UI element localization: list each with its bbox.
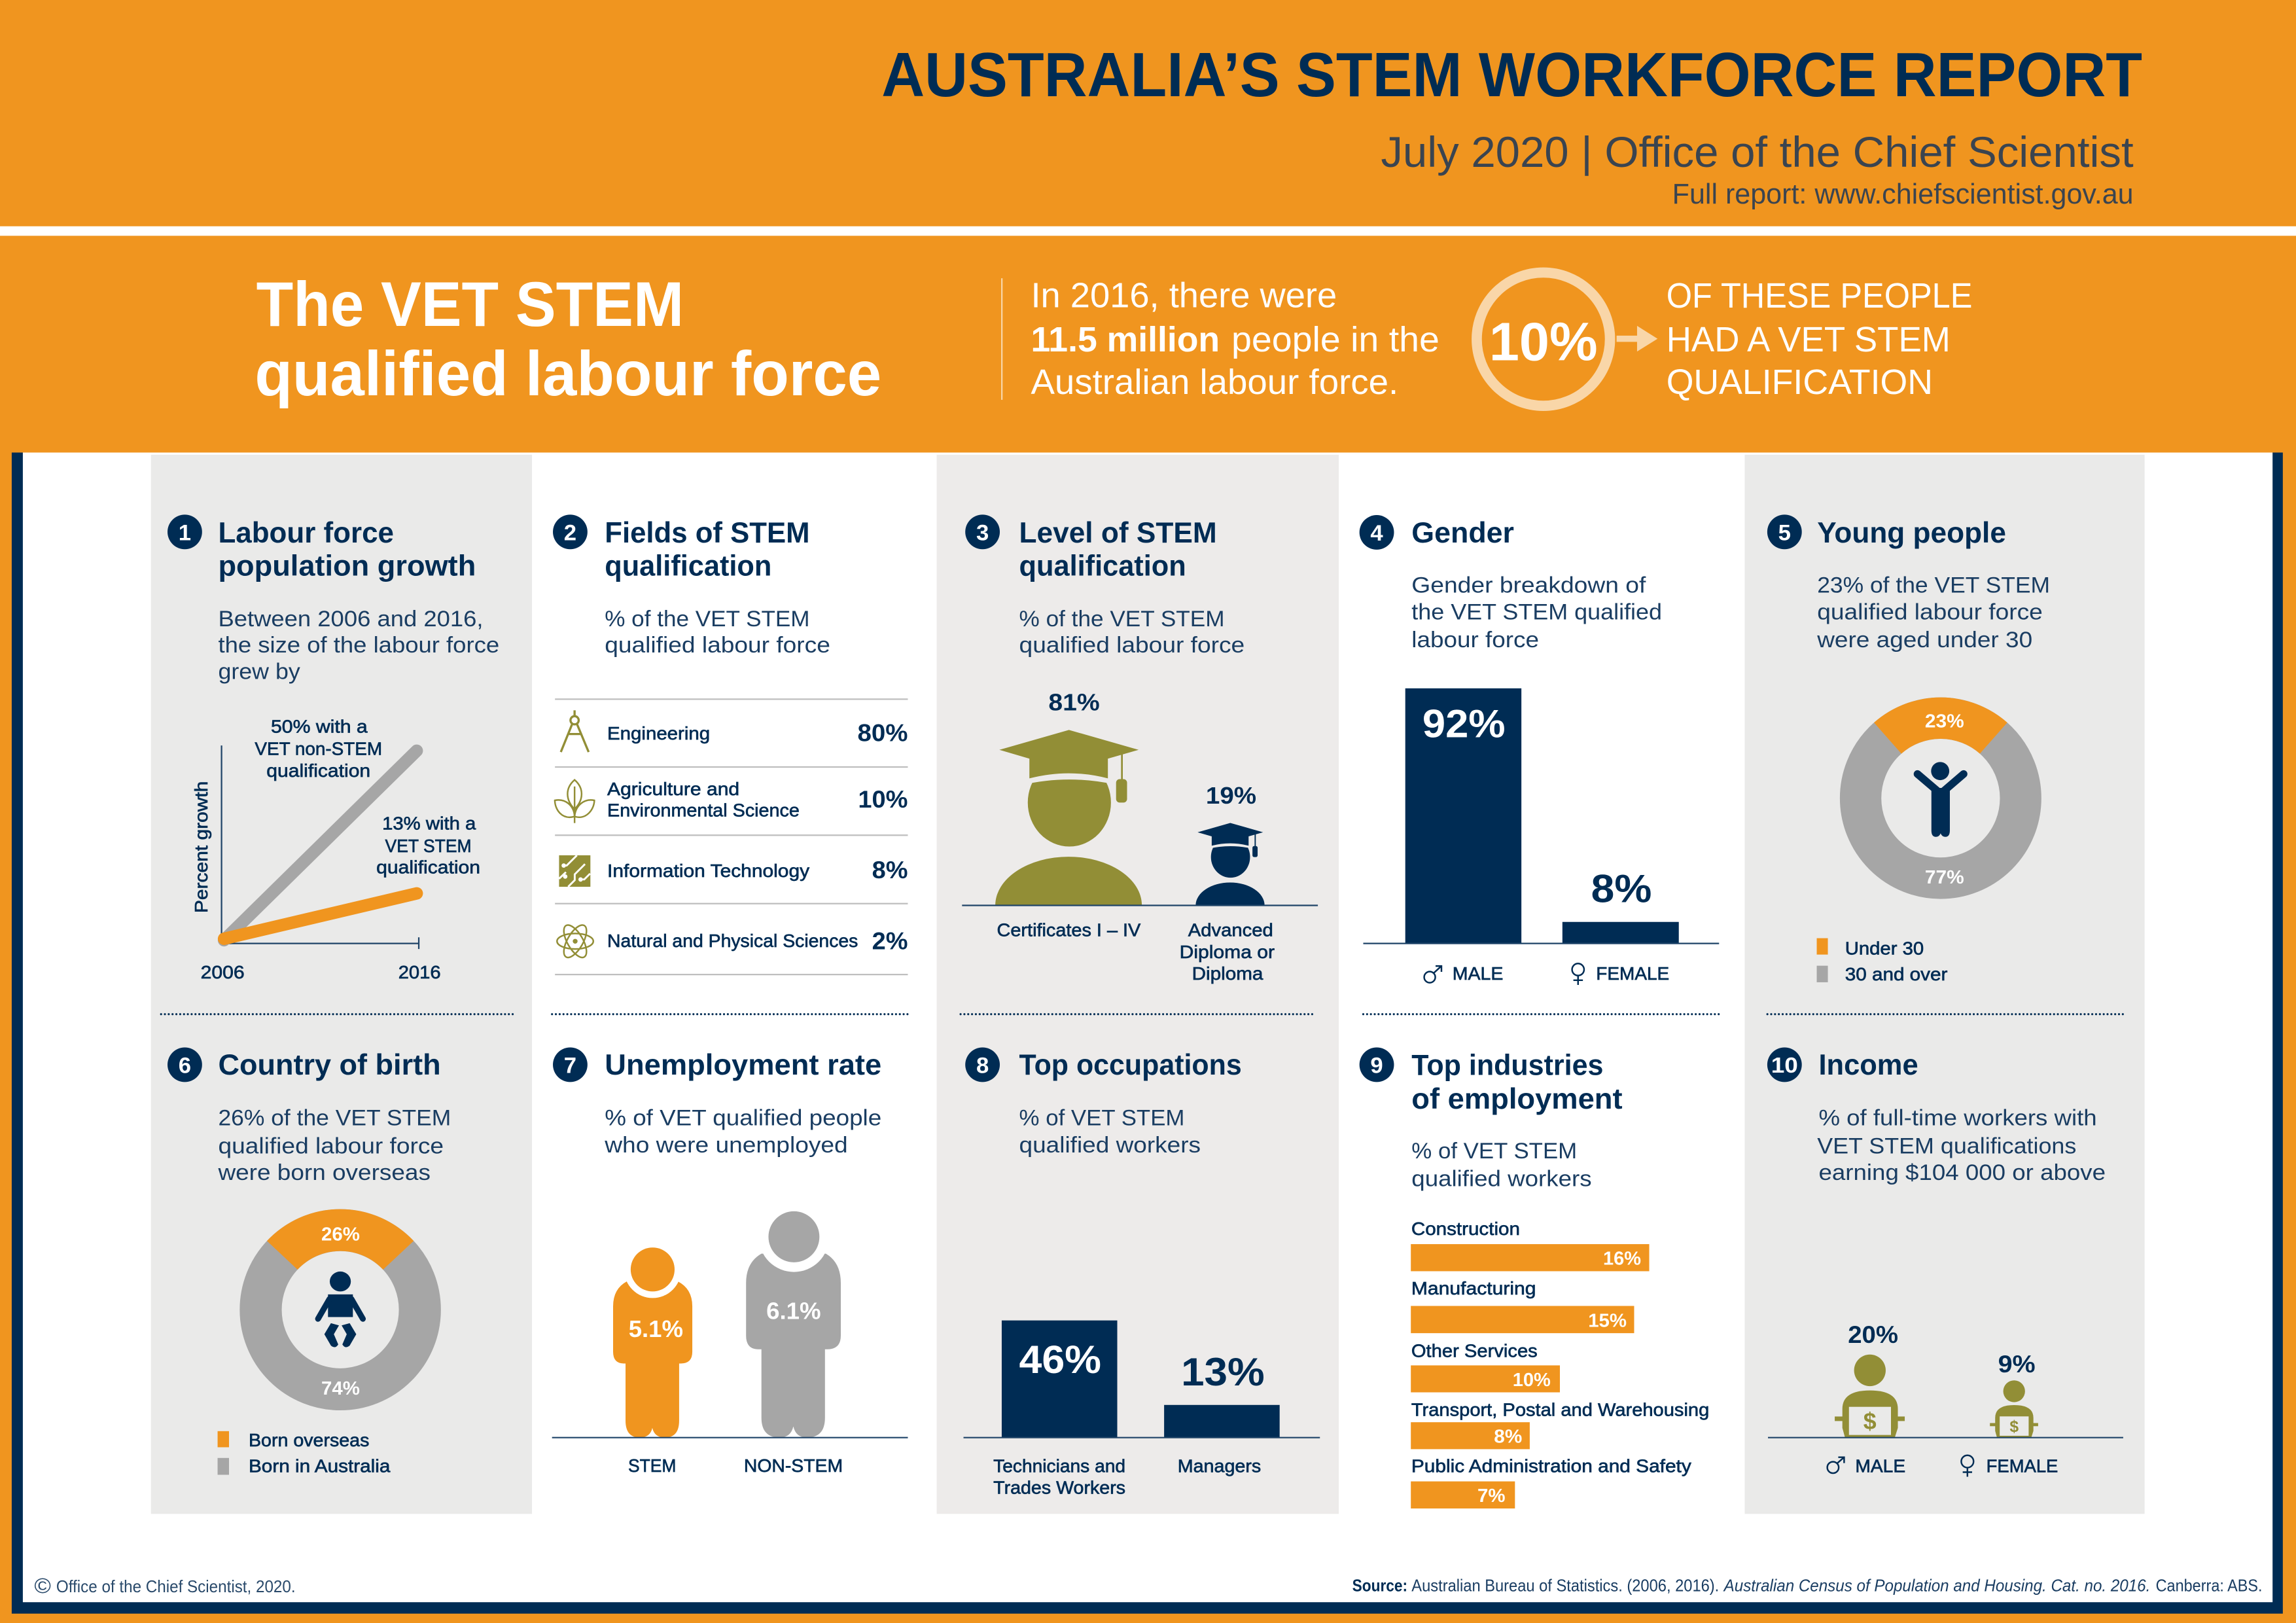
heading: qualification bbox=[605, 549, 771, 582]
number badge 5: 5 bbox=[1778, 520, 1791, 545]
banner statement: 11.5 million bbox=[1031, 320, 1220, 359]
information technology row: 8% bbox=[872, 857, 908, 883]
donut chart: birthplace: 26% bbox=[321, 1224, 360, 1245]
line chart: percent growth: 2016 bbox=[398, 962, 441, 982]
banner statement: In 2016, there were bbox=[1031, 276, 1337, 315]
panel: 1 labour force population growth bbox=[151, 455, 532, 1014]
bar: other services: Other Services bbox=[1411, 1340, 1538, 1361]
number badge 2: 2 bbox=[564, 520, 576, 545]
description: % of the VET STEM bbox=[605, 607, 810, 632]
line chart: percent growth bbox=[191, 717, 480, 982]
icon: male worker: $ bbox=[1863, 1408, 1877, 1435]
figure: non-STEM bbox=[746, 1202, 841, 1438]
full report link: Full report: www.chiefscientist.gov.au bbox=[1672, 179, 2134, 210]
10% ring bbox=[1477, 272, 1610, 406]
natural sciences row: Natural and Physical Sciences bbox=[607, 931, 858, 951]
bar: public administration: 7% bbox=[1477, 1486, 1506, 1507]
heading bbox=[605, 516, 810, 582]
description: 26% of the VET STEM bbox=[218, 1106, 451, 1131]
description: the size of the labour force bbox=[218, 633, 499, 658]
technicians label: Trades Workers bbox=[993, 1477, 1125, 1497]
bar: transport: Transport, Postal and Warehousing bbox=[1411, 1399, 1709, 1419]
engineering row bbox=[607, 719, 908, 746]
banner heading: qualified labour force bbox=[255, 339, 881, 409]
banner statement continued: HAD A VET STEM bbox=[1667, 320, 1951, 359]
pictogram chart: income: MALE bbox=[1855, 1456, 1905, 1476]
icon: young person bbox=[1918, 762, 1964, 837]
heading: Top industries bbox=[1411, 1049, 1603, 1082]
legend: birthplace bbox=[218, 1430, 391, 1476]
panel: 6 country of birth bbox=[151, 1014, 532, 1514]
technicians label bbox=[993, 1456, 1125, 1497]
line chart: percent growth: Percent growth bbox=[191, 781, 211, 913]
advanced diploma label bbox=[1180, 920, 1275, 984]
footer: source: Australian Census of Population and Housing. Cat. no. 2016. bbox=[1723, 1577, 2150, 1595]
heading: Top occupations bbox=[1019, 1048, 1242, 1081]
number badge 7: 7 bbox=[564, 1053, 576, 1078]
horizontal bar chart: industries bbox=[1411, 1219, 1709, 1508]
pictogram chart: income: 9% bbox=[1998, 1351, 2036, 1378]
panel: 4 gender bbox=[1360, 515, 1719, 985]
description: earning $104 000 or above bbox=[1818, 1160, 2106, 1185]
number badge 10: 10 bbox=[1771, 1054, 1798, 1078]
description bbox=[218, 607, 499, 685]
figure: non-STEM: 6.1% bbox=[766, 1298, 821, 1324]
advanced diploma label: Diploma bbox=[1192, 963, 1263, 984]
STEM label: qualification bbox=[376, 857, 480, 878]
footer: source bbox=[1352, 1577, 2263, 1595]
natural sciences row bbox=[607, 928, 908, 955]
description bbox=[217, 1106, 451, 1185]
icon: baby bbox=[318, 1272, 363, 1347]
description bbox=[1816, 573, 2050, 652]
footer: copyright bbox=[34, 1574, 296, 1597]
bar chart: gender: 8% bbox=[1591, 866, 1651, 911]
number badge 2 bbox=[553, 514, 588, 549]
icon: compass bbox=[561, 710, 589, 752]
description bbox=[1019, 607, 1245, 658]
number badge 3: 3 bbox=[976, 520, 989, 545]
STEM label: VET STEM bbox=[385, 836, 472, 856]
number badge 3 bbox=[965, 514, 1000, 549]
bar chart: gender bbox=[1363, 688, 1719, 985]
icon: female worker bbox=[1990, 1380, 2038, 1438]
bar: transport: 8% bbox=[1494, 1426, 1522, 1447]
heading bbox=[1019, 516, 1217, 582]
banner statement continued: QUALIFICATION bbox=[1667, 363, 1933, 402]
pictogram: graduates bbox=[962, 689, 1318, 984]
heading: population growth bbox=[218, 549, 476, 582]
bar: transport bbox=[1411, 1399, 1709, 1449]
description: qualified labour force bbox=[1817, 600, 2043, 625]
bar: manufacturing bbox=[1411, 1278, 1634, 1333]
icon: female symbol bbox=[1961, 1455, 1973, 1476]
number badge 5 bbox=[1767, 514, 1802, 549]
heading: Income bbox=[1818, 1048, 1918, 1081]
line chart: percent growth: 2006 bbox=[201, 962, 245, 982]
description: VET STEM qualifications bbox=[1817, 1133, 2076, 1158]
banner statement: Australian labour force. bbox=[1031, 363, 1398, 402]
pictogram: graduates: Certificates I – IV bbox=[997, 920, 1141, 940]
bar: manufacturing: 15% bbox=[1588, 1311, 1627, 1332]
banner statement: people in the bbox=[1231, 320, 1439, 359]
panel: 7 unemployment rate bbox=[552, 1048, 908, 1476]
figure: STEM bbox=[613, 1241, 692, 1438]
title: AUSTRALIA’S STEM WORKFORCE REPORT bbox=[881, 41, 2142, 110]
description bbox=[1019, 1106, 1201, 1158]
heading bbox=[1411, 1049, 1623, 1115]
bar chart: gender: FEMALE bbox=[1596, 963, 1669, 984]
panel: 2 fields of STEM qualification bbox=[553, 514, 908, 974]
number badge 6: 6 bbox=[179, 1053, 191, 1078]
natural sciences row: 2% bbox=[872, 928, 908, 955]
advanced diploma label: Advanced bbox=[1188, 920, 1273, 940]
footer: source: Source: bbox=[1352, 1577, 1407, 1595]
description: 23% of the VET STEM bbox=[1817, 573, 2050, 598]
icon: male symbol bbox=[1828, 1457, 1844, 1473]
fields table bbox=[555, 699, 908, 974]
description bbox=[605, 607, 830, 658]
icon: atom bbox=[557, 921, 593, 961]
donut chart: age: 77% bbox=[1925, 867, 1964, 888]
bar: manufacturing: Manufacturing bbox=[1411, 1278, 1536, 1298]
pictogram chart: unemployment: NON-STEM bbox=[744, 1455, 843, 1476]
heading: Country of birth bbox=[218, 1048, 441, 1081]
engineering row: 80% bbox=[858, 719, 908, 746]
icon: male symbol bbox=[1424, 966, 1441, 983]
pictogram chart: unemployment: STEM bbox=[628, 1455, 676, 1476]
description bbox=[604, 1106, 881, 1158]
pictogram chart: income: FEMALE bbox=[1987, 1456, 2058, 1476]
description: % of full-time workers with bbox=[1818, 1106, 2097, 1131]
number badge 1: 1 bbox=[179, 520, 191, 545]
panel: 5 young people bbox=[1744, 455, 2145, 1014]
banner statement bbox=[1031, 276, 1439, 402]
footer: copyright: © bbox=[34, 1574, 51, 1597]
description bbox=[1411, 1139, 1592, 1191]
footer: copyright: Office of the Chief Scientist, 2020. bbox=[56, 1578, 296, 1596]
heading: qualification bbox=[1019, 549, 1186, 582]
bar chart: gender: MALE bbox=[1453, 963, 1503, 984]
information technology row bbox=[607, 857, 908, 883]
10% ring: 10% bbox=[1489, 312, 1598, 372]
number badge 7 bbox=[553, 1048, 588, 1082]
legend: age: Under 30 bbox=[1845, 938, 1924, 959]
information technology row: Information Technology bbox=[607, 861, 809, 881]
description: qualified labour force bbox=[605, 633, 830, 658]
description: % of the VET STEM bbox=[1019, 607, 1225, 632]
number badge 4: 4 bbox=[1370, 521, 1383, 546]
bar chart: occupations: 46% bbox=[1019, 1337, 1101, 1382]
agriculture row: Environmental Science bbox=[607, 800, 800, 820]
icon: male worker bbox=[1835, 1355, 1905, 1438]
description: Between 2006 and 2016, bbox=[218, 607, 484, 632]
figure: STEM: 5.1% bbox=[629, 1316, 683, 1342]
bar: construction bbox=[1411, 1219, 1650, 1271]
heading: Labour force bbox=[218, 516, 394, 549]
icon: large graduate bbox=[995, 730, 1142, 905]
panel: 3 level of STEM qualification bbox=[937, 455, 1339, 1014]
heading bbox=[218, 516, 476, 582]
description: qualified workers bbox=[1019, 1133, 1201, 1158]
legend: birthplace: Born overseas bbox=[249, 1430, 369, 1450]
pictogram: graduates: 19% bbox=[1206, 783, 1256, 809]
description: who were unemployed bbox=[604, 1133, 848, 1158]
heading: Fields of STEM bbox=[605, 516, 810, 549]
engineering row: Engineering bbox=[607, 723, 710, 743]
non-STEM label bbox=[255, 717, 382, 781]
bar: other services: 10% bbox=[1513, 1370, 1551, 1391]
banner heading bbox=[255, 270, 881, 409]
pictogram chart: income: 20% bbox=[1848, 1321, 1898, 1348]
icon: female worker: $ bbox=[2009, 1418, 2019, 1436]
agriculture row: Agriculture and bbox=[607, 779, 739, 799]
heading: Unemployment rate bbox=[605, 1048, 881, 1081]
icon: leaves bbox=[555, 780, 594, 823]
description: qualified labour force bbox=[218, 1133, 444, 1158]
description: % of VET STEM bbox=[1411, 1139, 1577, 1164]
bar chart: occupations bbox=[964, 1321, 1320, 1497]
bar: public administration bbox=[1411, 1456, 1691, 1508]
banner heading: The VET STEM bbox=[256, 270, 684, 340]
description: qualified labour force bbox=[1019, 633, 1245, 658]
donut chart: birthplace: 74% bbox=[321, 1378, 360, 1399]
donut chart: age: 23% bbox=[1925, 711, 1964, 732]
heading: of employment bbox=[1411, 1082, 1623, 1115]
banner statement continued bbox=[1667, 276, 1972, 402]
banner: VET STEM qualified labour force bbox=[255, 270, 1972, 409]
agriculture row bbox=[607, 779, 908, 820]
footer: source: Australian Bureau of Statistics. (2006, 2016). bbox=[1411, 1577, 1719, 1595]
description: were aged under 30 bbox=[1816, 628, 2032, 652]
number badge 8 bbox=[965, 1048, 1000, 1082]
heading: Gender bbox=[1411, 516, 1514, 549]
description bbox=[1817, 1106, 2106, 1185]
icon: female symbol bbox=[1572, 963, 1584, 985]
panel: 9 top industries of employment bbox=[1360, 1048, 1709, 1508]
description: % of VET qualified people bbox=[605, 1106, 881, 1131]
STEM label bbox=[376, 813, 480, 878]
number badge 9 bbox=[1360, 1048, 1394, 1082]
icon: small graduate bbox=[1195, 823, 1265, 905]
description: labour force bbox=[1411, 628, 1539, 652]
heading: Level of STEM bbox=[1019, 516, 1217, 549]
bar chart: occupations: 13% bbox=[1181, 1349, 1265, 1394]
donut chart: age bbox=[1861, 698, 2021, 888]
bar: public administration: Public Administration and Safety bbox=[1411, 1456, 1691, 1476]
header: report title bbox=[881, 41, 2142, 210]
technicians label: Technicians and bbox=[993, 1456, 1125, 1476]
footer: source: Canberra: ABS. bbox=[2156, 1577, 2263, 1595]
legend: birthplace: Born in Australia bbox=[249, 1456, 391, 1476]
donut chart: birthplace bbox=[260, 1209, 420, 1399]
bar: construction: Construction bbox=[1411, 1219, 1520, 1239]
bar: other services bbox=[1411, 1340, 1560, 1393]
pictogram chart: income bbox=[1768, 1321, 2123, 1476]
panel: 10 income bbox=[1744, 1014, 2145, 1514]
number badge 10 bbox=[1767, 1048, 1802, 1082]
heading: Young people bbox=[1817, 516, 2006, 549]
number badge 8: 8 bbox=[976, 1053, 989, 1078]
number badge 6 bbox=[168, 1048, 202, 1082]
bar chart: gender: 92% bbox=[1422, 701, 1506, 745]
icon: circuit board bbox=[559, 855, 590, 887]
description: were born overseas bbox=[217, 1160, 431, 1185]
panel: 8 top occupations bbox=[937, 1014, 1339, 1514]
description: % of VET STEM bbox=[1019, 1106, 1184, 1131]
date and publisher: July 2020 | Office of the Chief Scientist bbox=[1381, 128, 2134, 176]
number badge 9: 9 bbox=[1370, 1053, 1383, 1078]
legend: age: 30 and over bbox=[1845, 964, 1947, 984]
bar chart: occupations: Managers bbox=[1178, 1456, 1261, 1476]
number badge 4 bbox=[1360, 515, 1394, 550]
description bbox=[1411, 573, 1662, 652]
description: Gender breakdown of bbox=[1411, 573, 1646, 598]
advanced diploma label: Diploma or bbox=[1180, 942, 1275, 962]
description: the VET STEM qualified bbox=[1411, 600, 1662, 625]
pictogram: graduates: 81% bbox=[1048, 689, 1100, 715]
STEM label: 13% with a bbox=[382, 813, 476, 834]
pictogram chart: unemployment bbox=[552, 1202, 908, 1476]
banner statement continued: OF THESE PEOPLE bbox=[1667, 276, 1972, 315]
description: qualified workers bbox=[1411, 1166, 1592, 1191]
agriculture row: 10% bbox=[858, 786, 908, 813]
non-STEM label: qualification bbox=[266, 760, 370, 781]
description: grew by bbox=[218, 660, 300, 685]
non-STEM label: VET non-STEM bbox=[255, 739, 382, 759]
non-STEM label: 50% with a bbox=[271, 717, 368, 737]
arrow bbox=[1617, 326, 1657, 351]
bar: construction: 16% bbox=[1603, 1249, 1641, 1270]
legend: age bbox=[1817, 938, 1947, 984]
number badge 1 bbox=[168, 514, 202, 549]
